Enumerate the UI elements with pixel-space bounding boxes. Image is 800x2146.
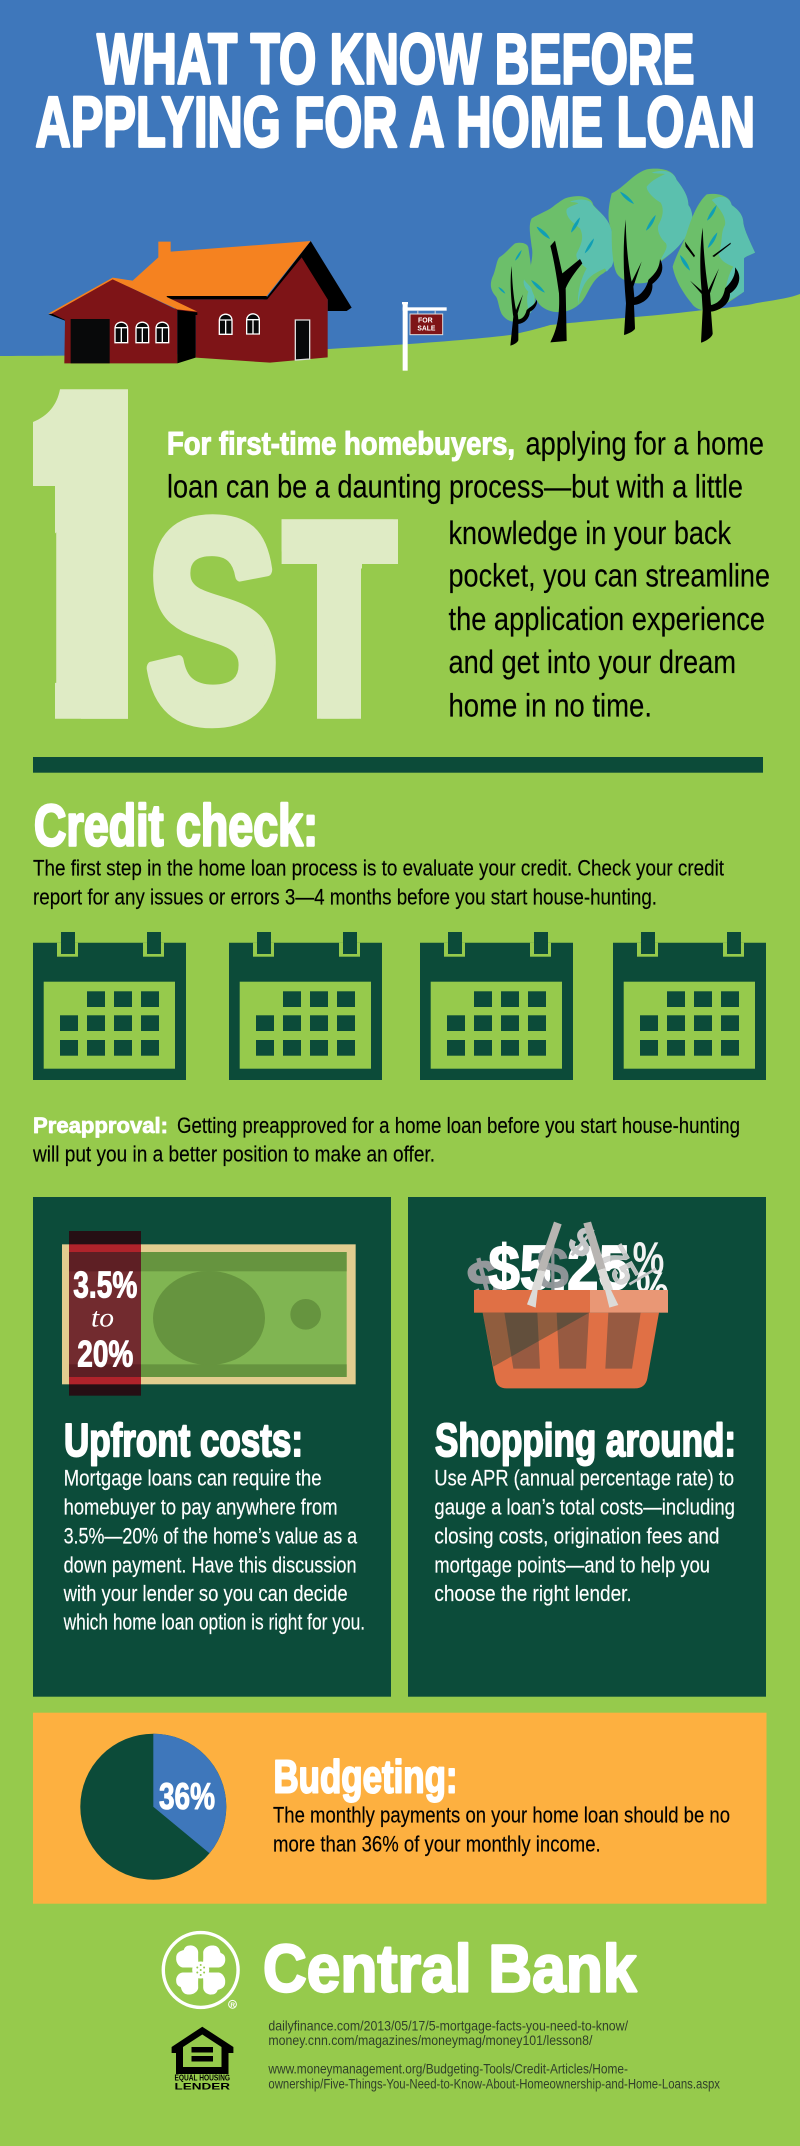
intro text: and get into your dream <box>448 644 736 680</box>
large 1ST graphic <box>33 389 398 728</box>
heading: credit check: Credit check: <box>34 794 318 859</box>
background sky <box>0 0 800 400</box>
icon: basket of prices: $ <box>560 1219 605 1267</box>
pie chart: 36%: 36% <box>159 1776 215 1817</box>
illustration: house <box>48 241 352 363</box>
intro text: knowledge in your back <box>448 515 732 551</box>
illustration: for sale sign: FOR <box>418 318 433 325</box>
tree 2 <box>530 196 614 342</box>
tree 4 <box>673 194 755 343</box>
icon: basket of prices: 75 <box>593 1239 646 1292</box>
icon: dollar bill with percent band: 20% <box>77 1334 133 1375</box>
upfront costs text: Mortgage loans can require the <box>64 1466 322 1491</box>
section: credit check <box>33 794 724 909</box>
budgeting text: The monthly payments on your home loan should be no <box>273 1803 730 1828</box>
tree 3 <box>609 169 692 335</box>
preapproval text <box>32 1113 740 1167</box>
icon: basket of prices <box>461 1219 669 1388</box>
large 1ST graphic: S <box>146 464 279 780</box>
credit check text <box>33 856 724 909</box>
title <box>36 20 755 162</box>
icon: basket of prices: $ <box>461 1247 508 1316</box>
intro text: For first-time homebuyers, <box>167 425 515 461</box>
logo: Central Bank <box>163 1932 637 2009</box>
shopping around text: gauge a loan’s total costs—including <box>434 1495 735 1520</box>
source links: dailyfinance.com/2013/05/17/5-mortgage-facts-you-need-to-know/ <box>268 2018 628 2034</box>
panel: budgeting <box>33 1713 766 1904</box>
budgeting text <box>273 1803 730 1857</box>
icon: basket of prices: $5.25 <box>488 1234 630 1304</box>
preapproval text: will put you in a better position to make an offer. <box>32 1142 435 1167</box>
illustration: trees <box>491 169 755 346</box>
icon: equal housing lender <box>172 2027 233 2092</box>
icon: equal housing lender: EQUAL HOUSING <box>174 2074 230 2083</box>
credit check text: report for any issues or errors 3—4 months before you start house-hunting. <box>33 884 657 909</box>
preapproval text: Preapproval: <box>33 1113 168 1138</box>
icon: dogwood flower in ring <box>163 1933 238 2009</box>
upfront costs text <box>63 1466 365 1635</box>
pie chart: 36% <box>80 1734 226 1880</box>
panel: upfront costs <box>33 1197 391 1697</box>
shopping around text: Use APR (annual percentage rate) to <box>434 1466 734 1491</box>
shopping around text: mortgage points—and to help you <box>434 1552 710 1577</box>
source links: money.cnn.com/magazines/moneymag/money101/lesson8/ <box>268 2032 592 2048</box>
illustration: for sale sign: SALE <box>417 325 436 332</box>
icon: dollar bill with percent band: to <box>91 1303 114 1333</box>
upfront costs text: 3.5%—20% of the home’s value as a <box>64 1523 358 1548</box>
heading: budgeting: Budgeting: <box>274 1750 458 1802</box>
icon: basket of prices: % <box>636 1262 669 1313</box>
budgeting text: more than 36% of your monthly income. <box>273 1832 601 1857</box>
icons: four calendars <box>33 932 766 1080</box>
large 1ST graphic: T <box>275 457 395 781</box>
wordmark: Central Bank <box>263 1932 637 2007</box>
icon: basket of prices: % <box>633 1232 664 1283</box>
divider bar <box>33 757 763 773</box>
panel: shopping around <box>408 1197 766 1697</box>
intro text: applying for a home <box>526 425 764 461</box>
shopping around text: closing costs, origination fees and <box>434 1523 719 1548</box>
illustration: for sale sign <box>402 302 447 371</box>
tree 1 <box>491 243 537 346</box>
icon: dollar bill with percent band <box>62 1231 356 1396</box>
upfront costs text: with your lender so you can decide <box>63 1581 348 1606</box>
icon: dogwood flower in ring: R <box>230 2002 235 2009</box>
intro text <box>167 425 770 724</box>
icon: dollar bill with percent band: 3.5% <box>73 1264 137 1305</box>
upfront costs text: which home loan option is right for you. <box>63 1610 365 1635</box>
upfront costs text: homebuyer to pay anywhere from <box>64 1495 338 1520</box>
source links: www.moneymanagement.org/Budgeting-Tools/Credit-Articles/Home- <box>268 2060 628 2076</box>
shopping around text: choose the right lender. <box>434 1581 632 1606</box>
large 1ST graphic: 1 <box>0 273 193 899</box>
shopping around text <box>434 1466 735 1606</box>
icon: basket of prices: $ <box>536 1235 569 1302</box>
upfront costs text: down payment. Have this discussion <box>64 1552 357 1577</box>
icon: equal housing lender: LENDER <box>174 2082 230 2092</box>
intro text: home in no time. <box>448 688 652 724</box>
heading: upfront costs: Upfront costs: <box>64 1414 303 1466</box>
source links <box>268 2018 720 2091</box>
